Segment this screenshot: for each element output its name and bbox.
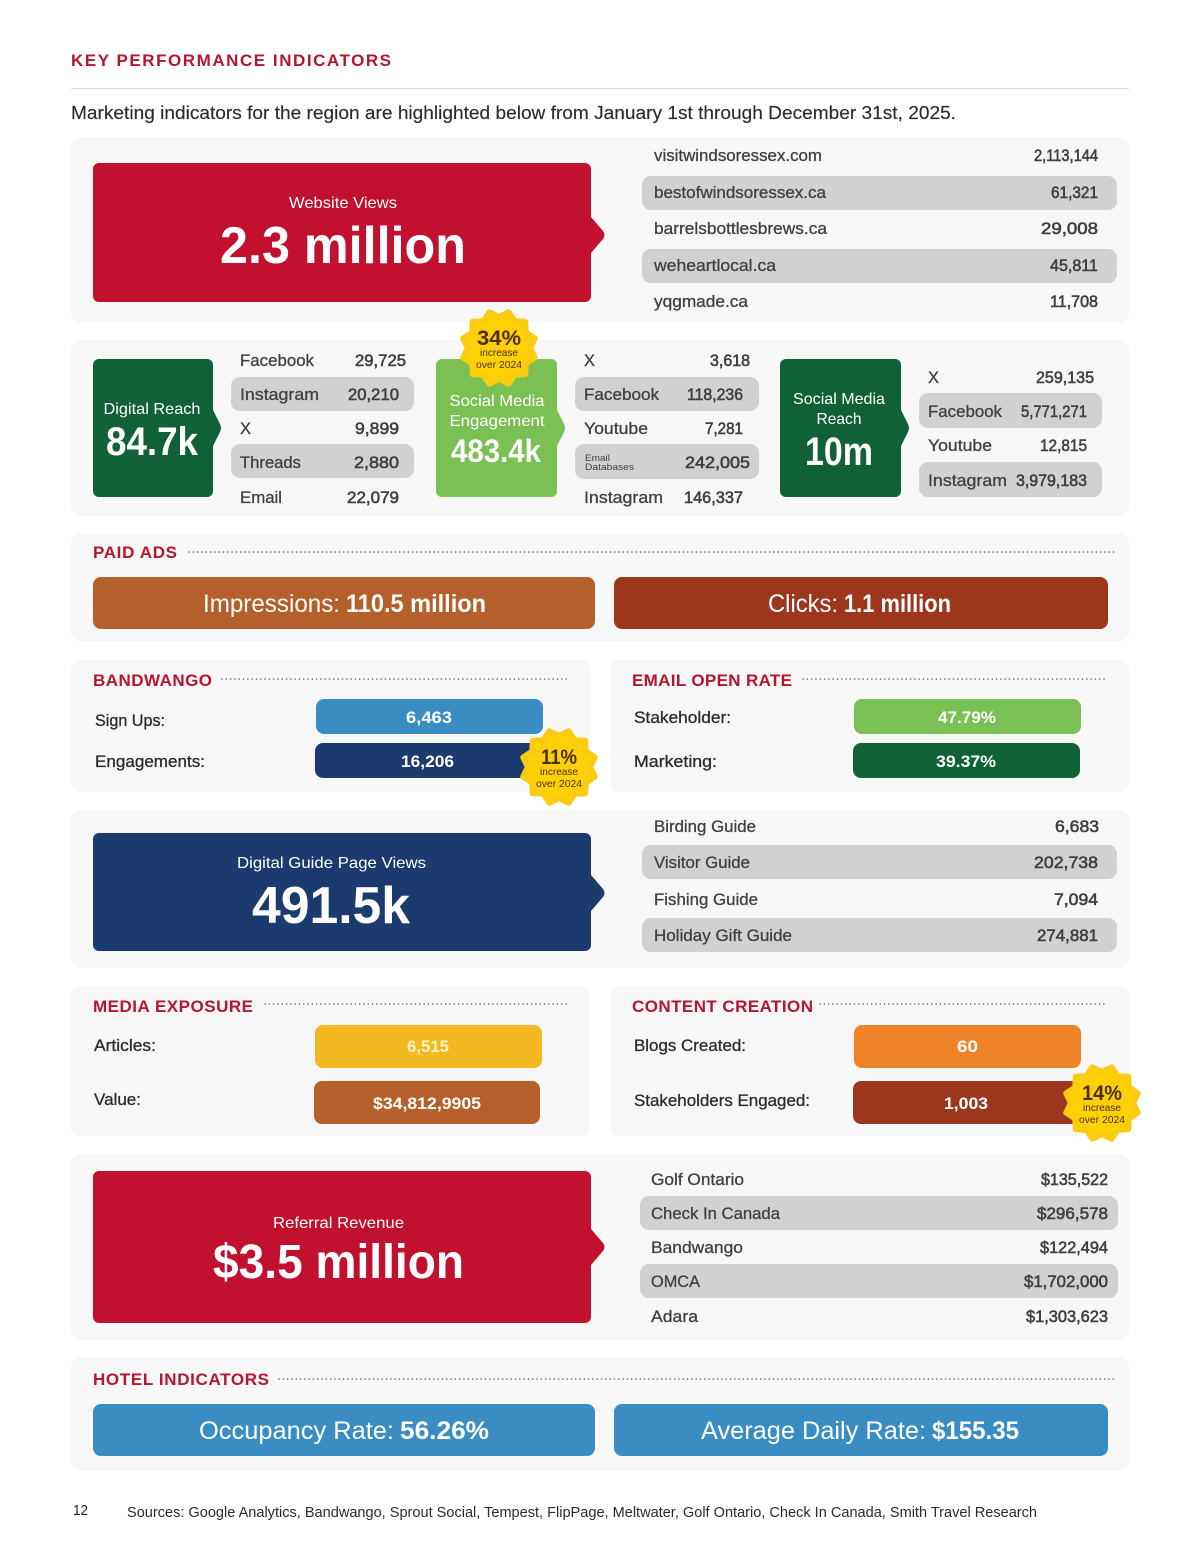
title: KEY PERFORMANCE INDICATORS (71, 51, 391, 70)
table: digital reach: 2,880 (354, 453, 399, 472)
row: fishing guide: Fishing Guide (654, 890, 758, 909)
badge: 14% increase: 14% (1082, 1082, 1122, 1105)
row: visitor guide (642, 845, 1117, 879)
table: social media engagement (575, 351, 759, 507)
bar: average daily rate (614, 1404, 1108, 1456)
heading: bandwango: BANDWANGO (93, 671, 212, 690)
table: digital reach: 22,079 (347, 488, 399, 507)
panel: bandwango (71, 660, 591, 792)
badge: 14% increase: increase (1083, 1102, 1121, 1114)
callout: digital guide page views (93, 833, 604, 951)
row: articles (94, 1025, 542, 1068)
panel: email open rate (610, 660, 1129, 792)
row: visitwindsoressex.com: visitwindsoressex.com (654, 146, 822, 165)
callout: website views (93, 163, 604, 302)
table: digital reach: Facebook (240, 351, 314, 370)
table: social media reach: 259,135 (1036, 368, 1094, 387)
callout: social media reach: 10m (805, 430, 873, 474)
row: birding guide: 6,683 (1055, 817, 1099, 836)
bar: impressions: Impressions: (203, 590, 340, 618)
table: social media reach: 3,979,183 (1016, 471, 1087, 490)
callout: referral revenue: $3.5 million (213, 1236, 464, 1289)
row: sign ups: 6,463 (406, 708, 452, 727)
callout: referral revenue (93, 1171, 604, 1323)
row: check in canada: $296,578 (1037, 1204, 1108, 1223)
table: social media reach: Youtube (928, 436, 992, 455)
badge: 34% increase: increase (480, 347, 518, 359)
row: stakeholder: Stakeholder: (634, 708, 731, 727)
row: bandwango (651, 1238, 1108, 1257)
row: yqgmade.ca (654, 292, 1098, 311)
row: value: Value: (94, 1090, 141, 1109)
row: yqgmade.ca: yqgmade.ca (654, 292, 749, 311)
badge: 11% increase: over 2024 (536, 778, 582, 790)
panel: digital guide page views (71, 810, 1129, 968)
row: articles: Articles: (94, 1036, 156, 1055)
bar: clicks (614, 577, 1108, 629)
bar: average daily rate: Average Daily Rate: (701, 1417, 926, 1445)
row: golf ontario (651, 1170, 1108, 1189)
table: social media engagement: Youtube (584, 419, 648, 438)
callout: digital reach: Digital Reach (104, 401, 200, 418)
panel: website views (71, 137, 1129, 322)
badge: 11% increase: 11% (541, 746, 577, 769)
bar: occupancy rate (93, 1404, 595, 1456)
heading: hotel indicators: HOTEL INDICATORS (93, 1370, 269, 1389)
table: social media engagement: 7,281 (705, 419, 743, 438)
row: golf ontario: Golf Ontario (651, 1170, 744, 1189)
heading: media exposure: MEDIA EXPOSURE (93, 997, 253, 1016)
row: weheartlocal.ca: weheartlocal.ca (653, 256, 777, 275)
row: holiday gift guide (642, 918, 1117, 952)
table: social media reach: Facebook (928, 402, 1002, 421)
table: digital reach: 29,725 (355, 351, 406, 370)
sources: Sources: Google Analytics, Bandwango, Sprout Social, Tempest, FlipPage, Meltwater, Golf Ontario, Check In Canada, Smith Travel Research (127, 1505, 1037, 1521)
callout: website views: Website Views (289, 195, 397, 212)
row: bestofwindsoressex.ca: bestofwindsoressex.ca (654, 183, 827, 202)
table: social media reach: 5,771,271 (1021, 402, 1087, 421)
row: holiday gift guide: 274,881 (1037, 926, 1098, 945)
row: stakeholder: 47.79% (938, 708, 996, 727)
callout: social media engagement: 483.4k (451, 433, 541, 469)
table: social media engagement: Instagram (584, 488, 663, 507)
row: omca: OMCA (651, 1272, 701, 1291)
table: digital reach: X (240, 419, 251, 438)
row: stakeholders engaged: 1,003 (944, 1094, 988, 1113)
table: social media reach: 12,815 (1040, 436, 1087, 455)
row: engagements: 16,206 (401, 752, 454, 771)
panel: paid ads (71, 534, 1129, 641)
table: digital reach: Threads (240, 453, 301, 472)
bar: clicks: 1.1 million (844, 590, 951, 618)
row: sign ups: Sign Ups: (95, 711, 165, 730)
bar: occupancy rate: Occupancy Rate: (199, 1417, 394, 1445)
table: social media engagement: 242,005 (685, 453, 750, 472)
row: marketing (634, 743, 1080, 778)
callout: social media engagement: Engagement (450, 413, 545, 430)
row: golf ontario: $135,522 (1041, 1170, 1108, 1189)
table: social media engagement: 118,236 (687, 385, 743, 404)
row: barrelsbottlesbrews.ca: 29,008 (1041, 219, 1098, 238)
table: social media reach (919, 368, 1102, 497)
badge: 34% increase: over 2024 (476, 359, 522, 371)
row: stakeholder (634, 699, 1081, 734)
table: digital reach: Email (240, 488, 282, 507)
row: visitor guide: Visitor Guide (654, 853, 750, 872)
panel: hotel indicators (71, 1357, 1129, 1471)
row: weheartlocal.ca: 45,811 (1050, 256, 1098, 275)
panel: social metrics (71, 312, 1129, 516)
badge: 34% increase (463, 312, 535, 384)
badge: 34% increase: 34% (477, 327, 521, 350)
row: bestofwindsoressex.ca (642, 176, 1117, 210)
badge: 11% increase (523, 731, 595, 803)
callout: referral revenue: Referral Revenue (273, 1215, 404, 1232)
panel: referral revenue (71, 1154, 1129, 1340)
bar: clicks: Clicks: (768, 590, 838, 618)
callout: website views: 2.3 million (220, 217, 466, 275)
table: digital reach: 20,210 (348, 385, 399, 404)
row: marketing: Marketing: (634, 752, 717, 771)
callout: digital guide page views: 491.5k (252, 877, 410, 935)
row: blogs created (634, 1025, 1081, 1068)
badge: 11% increase: increase (540, 766, 578, 778)
row: adara (651, 1307, 1108, 1326)
panel: content creation (610, 987, 1129, 1136)
row: marketing: 39.37% (936, 752, 996, 771)
heading: content creation: CONTENT CREATION (632, 997, 813, 1016)
callout: digital reach: 84.7k (106, 420, 199, 464)
callout: digital reach (93, 359, 221, 497)
row: adara: Adara (651, 1307, 699, 1326)
row: omca: $1,702,000 (1024, 1272, 1108, 1291)
table: social media engagement: 3,618 (710, 351, 750, 370)
intro text: Marketing indicators for the region are highlighted below from January 1st through December 31st, 2025. (71, 103, 956, 123)
table: social media engagement: Facebook (584, 385, 659, 404)
row: adara: $1,303,623 (1026, 1307, 1108, 1326)
row: bandwango: $122,494 (1040, 1238, 1108, 1257)
row: birding guide: Birding Guide (654, 817, 756, 836)
row: birding guide (654, 817, 1099, 836)
callout: social media reach: Reach (816, 411, 862, 428)
row: blogs created: Blogs Created: (634, 1036, 746, 1055)
table: digital reach (231, 351, 414, 507)
row: blogs created: 60 (957, 1037, 978, 1056)
heading: email open rate: EMAIL OPEN RATE (632, 671, 792, 690)
table: digital reach: Instagram (240, 385, 319, 404)
row: holiday gift guide: Holiday Gift Guide (654, 926, 792, 945)
bar: impressions: 110.5 million (346, 590, 486, 618)
callout: social media reach (780, 359, 909, 497)
row: visitwindsoressex.com: 2,113,144 (1034, 146, 1098, 165)
table: social media engagement: X (584, 351, 595, 370)
row: bestofwindsoressex.ca: 61,321 (1051, 183, 1098, 202)
row: yqgmade.ca: 11,708 (1050, 292, 1098, 311)
row: barrelsbottlesbrews.ca (654, 219, 1098, 238)
row: fishing guide (654, 890, 1098, 909)
row: sign ups (95, 699, 543, 734)
callout: social media engagement (436, 359, 565, 497)
row: weheartlocal.ca (642, 249, 1117, 283)
bar: average daily rate: $155.35 (932, 1417, 1019, 1445)
row: barrelsbottlesbrews.ca: barrelsbottlesbrews.ca (654, 219, 828, 238)
row: visitor guide: 202,738 (1034, 853, 1098, 872)
callout: digital guide page views: Digital Guide Page Views (237, 855, 426, 872)
table: social media reach: Instagram (928, 471, 1007, 490)
page number: 12 (73, 1503, 88, 1519)
badge: 14% increase (1066, 1067, 1138, 1139)
table: social media engagement: Email (585, 453, 610, 464)
row: engagements (95, 743, 542, 778)
callout: social media engagement: Social Media (450, 393, 545, 410)
row: check in canada (640, 1196, 1118, 1230)
badge: 14% increase: over 2024 (1079, 1114, 1125, 1126)
table: social media engagement: 146,337 (684, 488, 743, 507)
callout: social media reach: Social Media (793, 391, 885, 408)
bar: impressions (93, 577, 595, 629)
row: value: $34,812,9905 (373, 1094, 481, 1113)
table: digital reach: 9,899 (355, 419, 399, 438)
row: visitwindsoressex.com (654, 146, 1098, 165)
row: check in canada: Check In Canada (651, 1204, 781, 1223)
row: value (94, 1081, 540, 1124)
row: stakeholders engaged: Stakeholders Engaged: (634, 1091, 810, 1110)
row: stakeholders engaged (634, 1081, 1093, 1124)
heading: paid ads: PAID ADS (93, 543, 177, 562)
row: bandwango: Bandwango (651, 1238, 743, 1257)
row: omca (640, 1264, 1118, 1298)
row: fishing guide: 7,094 (1054, 890, 1098, 909)
panel: media exposure (70, 987, 590, 1136)
row: articles: 6,515 (407, 1037, 449, 1056)
bar: occupancy rate: 56.26% (400, 1417, 489, 1445)
table: social media engagement: Databases (585, 462, 634, 473)
row: engagements: Engagements: (95, 752, 205, 771)
table: social media reach: X (928, 368, 939, 387)
